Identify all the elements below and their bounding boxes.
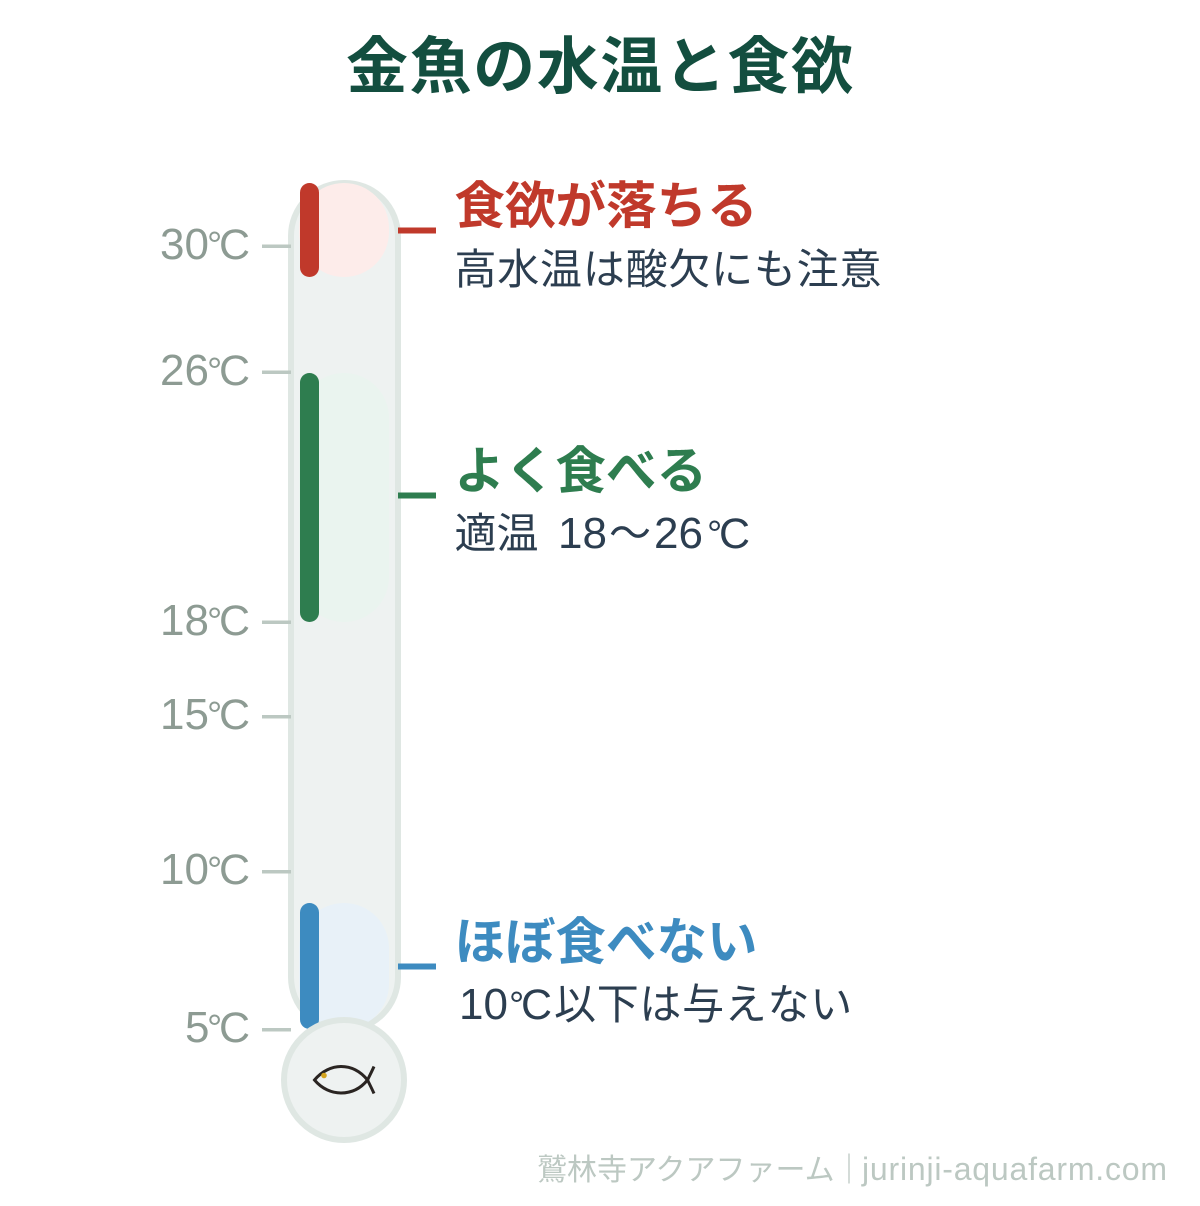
callout: appetite drops: 食欲が落ちる (454, 164, 758, 238)
tick 26°C: 26 (160, 346, 209, 395)
tick 18°C: C (219, 597, 250, 645)
footer credit (537, 1145, 1167, 1189)
tick 10°C: C (219, 846, 250, 894)
icon: goldfish (314, 1066, 374, 1094)
callout: eats well: 適温 (454, 510, 539, 557)
tick 15°C: ° (207, 695, 222, 737)
tick 30°C: ° (207, 225, 222, 267)
tick 30°C: C (219, 221, 250, 269)
tick 18°C: 18 (160, 596, 209, 645)
callout: eats well: 18 (558, 509, 607, 558)
zone: low temperature band (299, 903, 389, 1029)
callout: hardly eats: ほぼ食べない (454, 900, 758, 974)
tick 15°C: C (219, 691, 250, 739)
zone: optimal temperature band (299, 373, 389, 622)
callout: appetite drops: 高水温は酸欠にも注意 (454, 246, 882, 293)
tick 26°C (160, 346, 291, 395)
callout: hardly eats: ° (509, 985, 524, 1027)
callout: eats well: よく食べる (454, 430, 707, 504)
zone: high temperature band (299, 183, 389, 277)
title: 金魚の水温と食欲 (346, 16, 853, 106)
tick 10°C: 10 (160, 845, 209, 894)
tick 26°C: C (219, 347, 250, 395)
callout: eats well: 〜 (609, 510, 651, 557)
thermometer tube (291, 183, 398, 1030)
temperature scale (160, 220, 291, 1052)
footer credit: 鷲林寺アクアファーム (537, 1145, 835, 1189)
tick 18°C (160, 596, 291, 645)
callout: hardly eats: C (521, 981, 552, 1029)
callout: eats well (398, 430, 750, 558)
footer credit: ｜ (834, 1145, 864, 1189)
tick 26°C: ° (207, 351, 222, 393)
tick 15°C (160, 690, 291, 739)
tick 15°C: 15 (160, 690, 209, 739)
tick 18°C: ° (207, 601, 222, 643)
thermometer bulb (284, 1020, 404, 1140)
tick 5°C (185, 1003, 291, 1052)
tick 5°C: 5 (185, 1003, 209, 1052)
callout: eats well: ° (707, 514, 722, 556)
callout: hardly eats: 以下は与えない (554, 981, 853, 1028)
callout: eats well: 26 (654, 509, 703, 558)
callout: hardly eats (398, 900, 853, 1029)
footer credit: jurinji-aquafarm.com (861, 1151, 1167, 1187)
tick 30°C: 30 (160, 220, 209, 269)
callout: appetite drops (398, 164, 882, 293)
thermometer (284, 183, 404, 1140)
tick 5°C: ° (207, 1008, 222, 1050)
tick 5°C: C (219, 1004, 250, 1052)
callout: hardly eats: 10 (459, 980, 508, 1029)
tick 10°C: ° (207, 850, 222, 892)
tick 10°C (160, 845, 291, 894)
callout: eats well: C (719, 510, 750, 558)
tick 30°C (160, 220, 291, 269)
